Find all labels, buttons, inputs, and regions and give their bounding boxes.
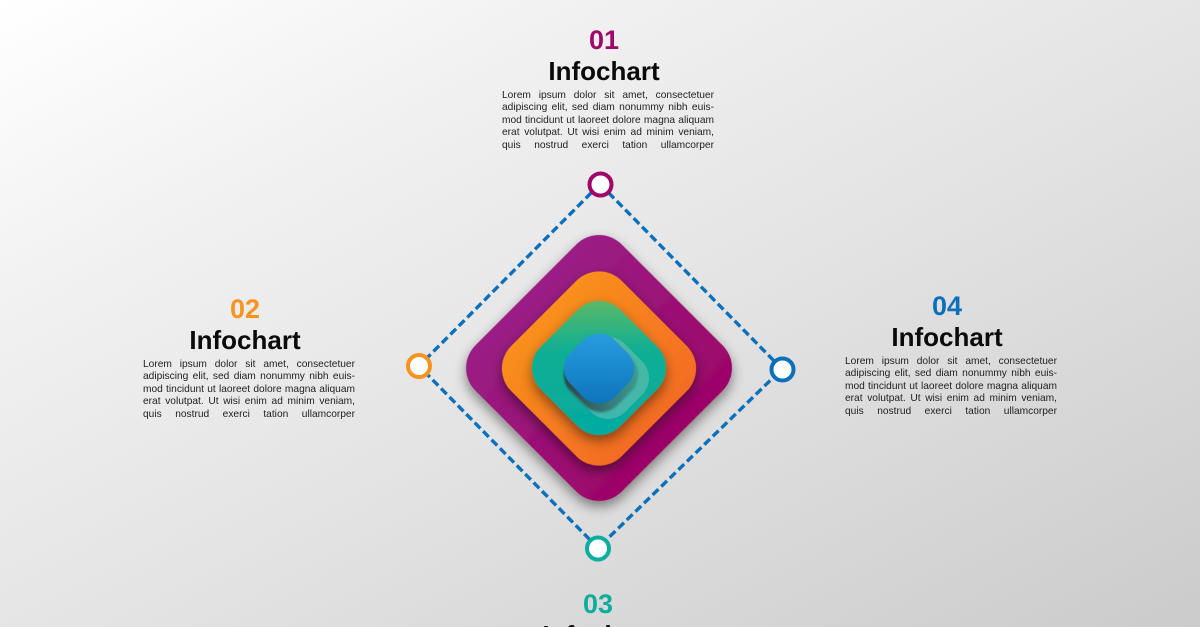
text block 03 bbox=[542, 589, 654, 627]
diamond: teal layer bbox=[520, 289, 678, 447]
node: 03 bbox=[587, 538, 609, 560]
body text 02: mod tincidunt ut laoreet dolore magna aliquam bbox=[143, 384, 355, 395]
heading 04: Infochart bbox=[891, 322, 1003, 352]
diamond: purple layer bbox=[453, 222, 745, 514]
body text 01: mod tincidunt ut laoreet dolore magna aliquam bbox=[502, 115, 714, 126]
number 03: 03 bbox=[583, 589, 613, 619]
diamond: blue centre bbox=[555, 324, 643, 413]
body text 01: quis nostrud exerci tation ullamcorper bbox=[502, 140, 714, 151]
body text 02: erat volutpat. Ut wisi enim ad minim veniam, bbox=[143, 396, 355, 407]
body text 01: erat volutpat. Ut wisi enim ad minim veniam, bbox=[502, 127, 714, 138]
heading 02: Infochart bbox=[189, 325, 301, 355]
body text 02: adipiscing elit, sed diam nonummy nibh euis- bbox=[143, 371, 355, 382]
body text 02: quis nostrud exerci tation ullamcorper bbox=[143, 409, 355, 420]
number 02: 02 bbox=[230, 294, 260, 324]
text block 02 bbox=[143, 294, 355, 420]
body text 04: quis nostrud exerci tation ullamcorper bbox=[845, 406, 1057, 417]
number 01: 01 bbox=[589, 25, 619, 55]
node: 02 bbox=[408, 355, 430, 377]
icon shadow: pale long shadow of centre bbox=[557, 327, 659, 429]
body text 04: Lorem ipsum dolor sit amet, consectetuer bbox=[845, 356, 1057, 366]
body text 04: adipiscing elit, sed diam nonummy nibh euis- bbox=[845, 368, 1057, 379]
text block 04 bbox=[845, 291, 1057, 417]
body text 01 bbox=[502, 90, 714, 151]
body text 02: Lorem ipsum dolor sit amet, consectetuer bbox=[143, 358, 355, 370]
text block 01 bbox=[502, 25, 714, 151]
body text 04 bbox=[845, 356, 1057, 417]
diamond: orange layer bbox=[489, 258, 709, 479]
body text 04: mod tincidunt ut laoreet dolore magna aliquam bbox=[845, 381, 1057, 392]
node: 04 bbox=[772, 358, 794, 380]
body text 01: adipiscing elit, sed diam nonummy nibh euis- bbox=[502, 102, 714, 113]
icon shadow: dark offset of centre bbox=[554, 328, 648, 422]
body text 01: Lorem ipsum dolor sit amet, consectetuer bbox=[502, 90, 714, 100]
body text 02 bbox=[143, 358, 355, 420]
dashed frame bbox=[419, 184, 782, 548]
node: 01 bbox=[590, 174, 612, 196]
body text 04: erat volutpat. Ut wisi enim ad minim veniam, bbox=[845, 393, 1057, 404]
number 04: 04 bbox=[932, 291, 962, 321]
heading 01: Infochart bbox=[548, 56, 660, 86]
